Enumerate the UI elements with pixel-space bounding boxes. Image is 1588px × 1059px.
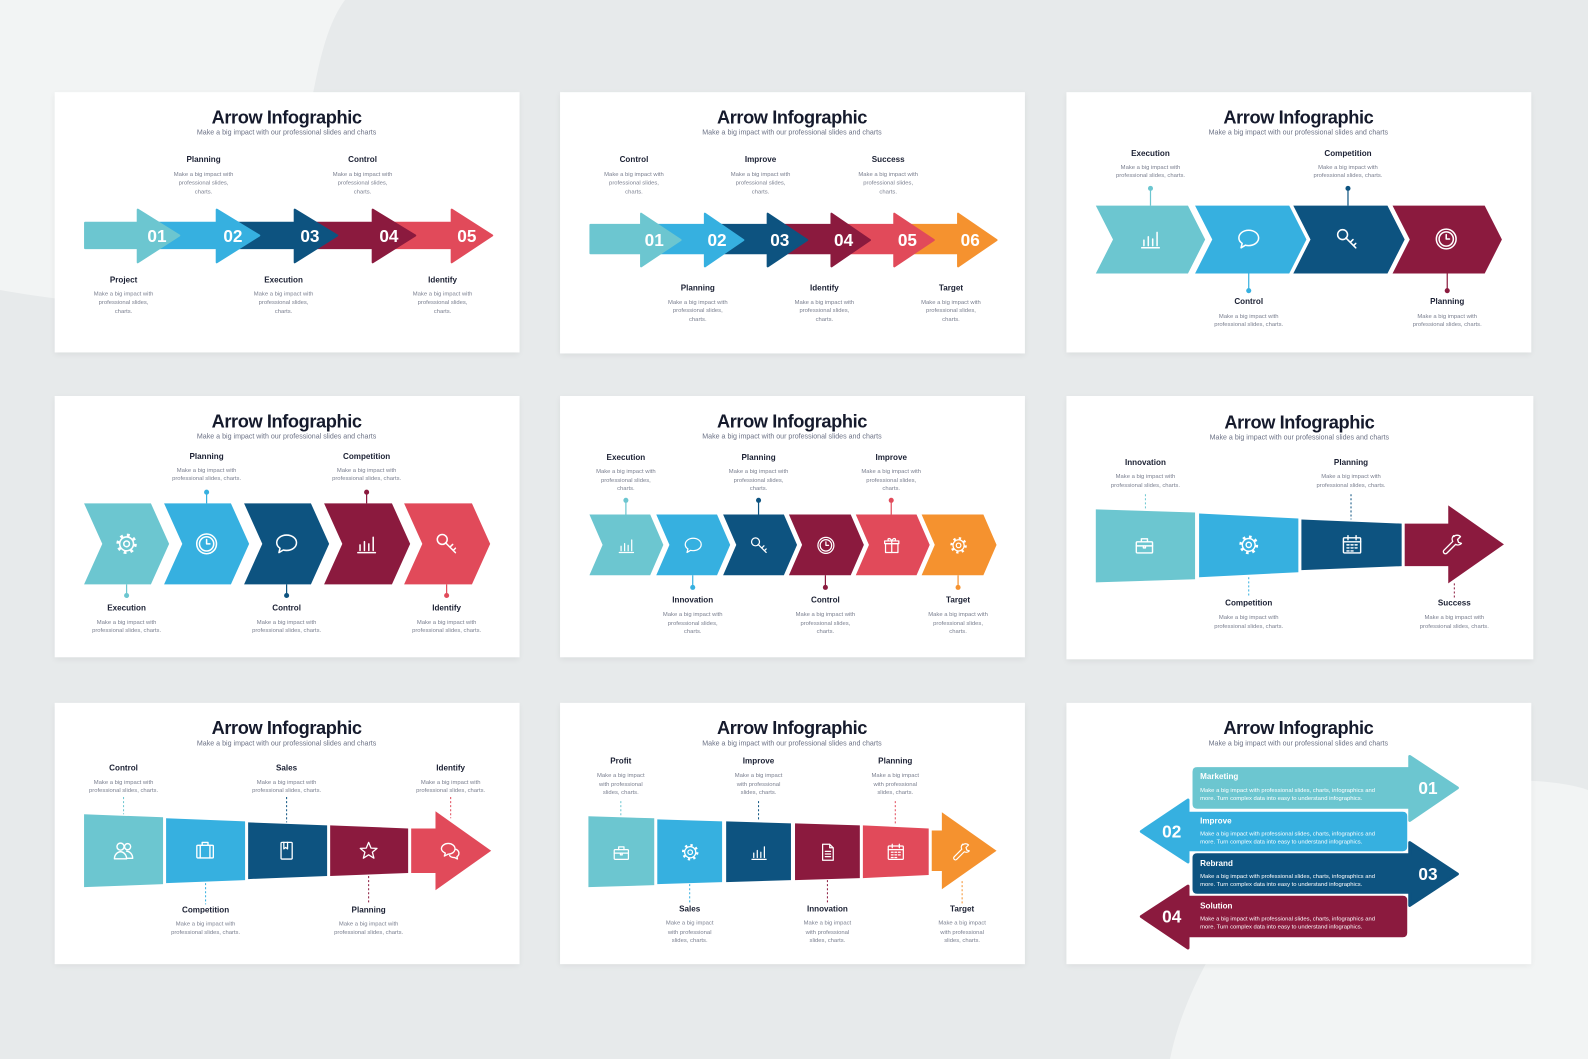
arrows 01-05: 04 (379, 226, 399, 246)
label: Control: Make a big impact with (257, 620, 316, 626)
arrows 01-06: 04 (834, 230, 854, 250)
label: Target: professional slides, (933, 621, 983, 627)
label: Planning (871, 757, 919, 796)
label: Control (1214, 297, 1284, 328)
label: Improve: with professional (736, 782, 780, 788)
label: Execution: Make a big impact with (97, 620, 156, 626)
label: Planning: Planning (741, 453, 776, 462)
label: Planning: Make a big impact with (339, 922, 398, 928)
label: Competition: Competition (343, 452, 390, 461)
arrow 01 Marketing: more. Turn complex data into easy to understand infographics. (1200, 796, 1363, 802)
arrows 01-06: 03 (770, 230, 789, 250)
arrow 02 Improve: Improve (1200, 816, 1232, 825)
label: Identify: Identify (436, 764, 466, 773)
label: Sales: professional slides, charts. (252, 788, 322, 794)
label: Control: Control (272, 604, 301, 613)
label: Identify: Identify (810, 284, 839, 293)
label: Profit (597, 757, 645, 796)
arrow 04 Solution: more. Turn complex data into easy to understand infographics. (1200, 925, 1363, 931)
label: Identify (795, 284, 854, 323)
label: Sales: Make a big impact with (257, 780, 316, 786)
heading: Arrow Infographic (717, 108, 867, 128)
label: Control: Make a big impact with (796, 612, 855, 618)
label: Success: Success (1438, 599, 1471, 608)
label: Planning: Make a big impact with (668, 300, 728, 306)
arrow 04 Solution (1141, 886, 1406, 948)
label: Control: Make a big impact with (333, 172, 392, 178)
label: Planning: Planning (878, 757, 912, 766)
label: Target: Make a big impact (938, 921, 986, 927)
label: Competition (1313, 149, 1383, 179)
label: Identify: Make a big impact with (413, 292, 472, 298)
label: Planning: Make a big impact with (1321, 474, 1381, 480)
label: Planning: professional slides, charts. (1413, 322, 1482, 328)
label: Sales: slides, charts. (672, 938, 708, 944)
panel: card 3 four chevrons with icons (1066, 92, 1531, 352)
tapered segments and arrow (84, 811, 491, 890)
heading (702, 411, 882, 441)
label: Control: professional slides, (338, 180, 388, 186)
label: Control: professional slides, (800, 621, 851, 627)
label: Success: Make a big impact with (1425, 615, 1484, 621)
label: Identify: Identify (432, 604, 462, 613)
panel: card 9 alternating arrows (1066, 703, 1531, 964)
heading (1209, 718, 1389, 747)
label: Control: charts. (625, 189, 643, 195)
label: Execution: professional slides, (259, 300, 309, 306)
label: Innovation: professional slides, charts. (1111, 483, 1180, 489)
label: Control: charts. (354, 189, 372, 195)
heading: Make a big impact with our professional slides and charts (197, 433, 377, 441)
label: Target: Target (950, 904, 974, 913)
arrow 04 Solution: Make a big impact with professional slides, charts, infographics and (1200, 917, 1375, 923)
heading: Arrow Infographic (1223, 718, 1374, 738)
label: Planning (172, 452, 241, 482)
arrow 02 Improve: 02 (1162, 822, 1181, 842)
heading: Make a big impact with our professional slides and charts (197, 739, 377, 747)
label: Identify: professional slides, (418, 300, 468, 306)
label: Control: Control (348, 155, 377, 164)
label: Planning: Planning (190, 452, 224, 461)
pins (623, 498, 961, 590)
label: Innovation (804, 904, 852, 944)
label: Identify (413, 276, 472, 315)
label: Target: Target (939, 284, 963, 293)
dashed connectors (124, 797, 451, 904)
label: Project: Make a big impact with (94, 292, 153, 298)
label: Improve: charts. (752, 189, 770, 195)
label: Profit: with professional (598, 782, 643, 788)
arrow 04 Solution: 04 (1162, 907, 1182, 927)
label: Competition (1214, 599, 1284, 630)
arrow 03 Rebrand: Rebrand (1200, 859, 1233, 868)
label: Profit: Make a big impact (597, 773, 645, 779)
panel: card 8 tapered six-part arrow (560, 703, 1025, 964)
label: Success: Make a big impact with (858, 172, 918, 178)
label: Target (938, 904, 986, 944)
label: Control: Control (109, 764, 138, 773)
heading (197, 411, 377, 441)
tapered segments and arrow (1096, 505, 1504, 583)
arrows 01-05: 02 (223, 226, 243, 246)
label: Target (928, 596, 988, 635)
label: Competition: Competition (182, 905, 229, 914)
label: Competition: professional slides, charts. (171, 930, 240, 936)
label: Execution (254, 276, 313, 315)
label: Profit: slides, charts. (603, 790, 639, 796)
label: Planning: charts. (689, 317, 707, 323)
label: Innovation: professional slides, (668, 621, 718, 627)
label: Target (921, 284, 981, 323)
label: Planning: Make a big impact with (729, 469, 788, 475)
heading: Arrow Infographic (717, 718, 867, 738)
arrow 01 Marketing: Marketing (1200, 772, 1238, 781)
heading: Make a big impact with our professional slides and charts (1209, 129, 1389, 137)
panel: card 4 five chevrons (55, 396, 520, 657)
heading (1209, 108, 1389, 137)
label: Target: professional slides, (926, 308, 976, 314)
arrow 01 Marketing: 01 (1418, 778, 1438, 798)
label: Target: charts. (942, 317, 960, 323)
label: Innovation: Make a big impact (804, 921, 852, 927)
label: Control: charts. (817, 629, 835, 635)
label: Sales: with professional (667, 930, 712, 936)
label: Identify: professional slides, (799, 308, 850, 314)
pins (124, 490, 449, 598)
label: Identify: Make a big impact with (417, 620, 476, 626)
label: Improve: Make a big impact with (731, 172, 790, 178)
heading: Arrow Infographic (212, 411, 362, 431)
arrow 02 Improve: more. Turn complex data into easy to understand infographics. (1200, 840, 1363, 846)
label: Improve: Make a big impact (735, 773, 783, 779)
heading: Make a big impact with our professional slides and charts (702, 739, 882, 747)
label: Identify: Make a big impact with (421, 780, 480, 786)
label: Improve: slides, charts. (741, 790, 777, 796)
label: Success (858, 155, 918, 195)
label: Planning: Planning (186, 155, 221, 164)
arrow 01 Marketing (1194, 757, 1457, 820)
label: Identify: charts. (434, 309, 452, 315)
label: Project: Project (110, 276, 138, 285)
label: Control: Make a big impact with (94, 780, 153, 786)
heading (197, 718, 377, 747)
label: Innovation: Make a big impact with (1116, 474, 1175, 480)
label: Planning (1413, 297, 1482, 328)
label: Planning: charts. (750, 486, 768, 492)
label: Innovation: with professional (805, 930, 849, 936)
label: Innovation (663, 596, 723, 635)
label: Planning (174, 155, 233, 195)
label: Sales (252, 764, 322, 794)
label: Improve: Improve (745, 155, 777, 164)
label: Planning: professional slides, (734, 478, 784, 484)
arrows 01-05: 05 (457, 226, 477, 246)
label: Competition (332, 452, 402, 482)
label: Innovation: Innovation (672, 596, 713, 605)
label: Execution: charts. (617, 486, 635, 492)
label: Execution (1116, 149, 1185, 179)
label: Planning: professional slides, (673, 308, 723, 314)
label: Identify: professional slides, charts. (416, 788, 486, 794)
label: Execution: Execution (607, 453, 645, 462)
label: Planning (1316, 458, 1386, 489)
label: Execution: charts. (275, 309, 293, 315)
heading (1210, 412, 1390, 442)
arrow 02 Improve: Make a big impact with professional slides, charts, infographics and (1200, 832, 1375, 838)
label: Competition: Competition (1324, 149, 1372, 158)
label: Success (1420, 599, 1489, 630)
label: Planning (729, 453, 788, 492)
label: Competition: Make a big impact with (176, 922, 235, 928)
heading (702, 718, 882, 747)
label: Execution: Execution (264, 276, 303, 285)
arrows 01-05: 01 (147, 226, 167, 246)
heading: Make a big impact with our professional slides and charts (1209, 739, 1389, 747)
label: Competition: Competition (1225, 599, 1272, 608)
label: Control (89, 764, 158, 794)
panel: card 6 tapered arrow (1066, 396, 1533, 659)
label: Execution: Make a big impact with (1121, 165, 1180, 171)
heading (702, 108, 882, 137)
label: Control (796, 596, 855, 635)
heading: Arrow Infographic (212, 108, 362, 128)
label: Planning: Planning (1430, 297, 1464, 306)
label: Control: professional slides, charts. (89, 788, 158, 794)
heading: Arrow Infographic (1223, 108, 1374, 128)
label: Success: professional slides, (863, 180, 913, 186)
label: Competition: professional slides, charts. (1313, 173, 1383, 179)
heading: Make a big impact with our professional slides and charts (702, 129, 882, 137)
label: Planning: Make a big impact (871, 773, 919, 779)
label: Target: Target (946, 596, 970, 605)
heading: Arrow Infographic (1224, 412, 1375, 432)
label: Planning (334, 905, 404, 936)
label: Control (252, 604, 322, 634)
label: Improve: professional slides, (736, 180, 786, 186)
arrows 01-06: 01 (645, 230, 664, 250)
heading: Make a big impact with our professional slides and charts (1210, 434, 1390, 442)
label: Control: professional slides, charts. (252, 628, 322, 634)
label: Target: Make a big impact with (928, 612, 988, 618)
chevrons (84, 503, 490, 584)
label: Improve: professional slides, (866, 478, 917, 484)
label: Execution: Make a big impact with (254, 292, 313, 298)
label: Target: charts. (949, 629, 967, 635)
label: Execution: Execution (107, 604, 146, 613)
heading: Make a big impact with our professional slides and charts (197, 129, 377, 137)
tapered segments and arrow (588, 812, 997, 889)
label: Planning: Planning (352, 905, 386, 914)
chevrons (1096, 206, 1502, 273)
label: Control: professional slides, charts. (1214, 322, 1284, 328)
label: Execution: Make a big impact with (596, 469, 656, 475)
pins (1148, 186, 1450, 293)
label: Execution: Execution (1131, 149, 1170, 158)
label: Profit: Profit (610, 757, 632, 766)
label: Project: charts. (115, 309, 133, 315)
arrow 02 Improve (1141, 800, 1406, 862)
label: Improve: Improve (875, 453, 907, 462)
label: Planning: professional slides, charts. (1316, 483, 1386, 489)
label: Planning: slides, charts. (877, 790, 914, 796)
label: Competition: Make a big impact with (337, 468, 396, 474)
arrow 04 Solution: Solution (1200, 901, 1233, 910)
label: Success: professional slides, charts. (1420, 624, 1489, 630)
panel: card 2 six numbered arrows (560, 92, 1025, 353)
label: Execution: professional slides, (601, 478, 651, 484)
label: Execution: professional slides, charts. (1116, 173, 1185, 179)
label: Target: slides, charts. (944, 938, 980, 944)
label: Target: Make a big impact with (921, 300, 981, 306)
dashed connectors (621, 801, 962, 903)
arrow 03 Rebrand: more. Turn complex data into easy to understand infographics. (1200, 882, 1363, 888)
arrow 03 Rebrand: Make a big impact with professional slides, charts, infographics and (1200, 874, 1375, 880)
label: Innovation: charts. (684, 629, 702, 635)
label: Innovation: Innovation (807, 904, 848, 913)
label: Planning: professional slides, (179, 180, 229, 186)
label: Improve (735, 757, 783, 796)
label: Control (333, 155, 392, 195)
label: Project: professional slides, (99, 300, 149, 306)
label: Control: Make a big impact with (604, 172, 664, 178)
label: Improve: charts. (882, 486, 900, 492)
label: Identify: Make a big impact with (795, 300, 854, 306)
label: Improve (731, 155, 790, 195)
label: Control (604, 155, 664, 195)
arrows 01-06: 06 (961, 230, 980, 250)
heading: Arrow Infographic (212, 718, 362, 738)
label: Competition: professional slides, charts. (332, 476, 402, 482)
label: Planning: Make a big impact with (174, 172, 233, 178)
label: Planning: Make a big impact with (177, 468, 236, 474)
label: Project (94, 276, 153, 315)
label: Sales: Sales (276, 764, 298, 773)
label: Innovation (1111, 458, 1180, 489)
heading: Make a big impact with our professional slides and charts (702, 433, 882, 441)
label: Competition: professional slides, charts. (1214, 624, 1284, 630)
label: Sales (666, 904, 714, 944)
dashed connectors (1145, 494, 1454, 598)
label: Innovation: Innovation (1125, 458, 1166, 467)
arrow 03 Rebrand (1194, 843, 1457, 905)
label: Execution: professional slides, charts. (92, 628, 161, 634)
label: Planning: Planning (681, 284, 715, 293)
label: Planning: professional slides, charts. (172, 476, 241, 482)
label: Innovation: slides, charts. (810, 938, 846, 944)
panel: card 1 five numbered arrows (55, 92, 520, 352)
label: Planning: with professional (872, 782, 917, 788)
label: Success: Success (872, 155, 905, 164)
label: Planning: charts. (195, 189, 213, 195)
label: Improve (861, 453, 921, 492)
label: Improve: Improve (743, 757, 775, 766)
arrows 01-06: 05 (898, 230, 917, 250)
label: Innovation: Make a big impact with (663, 612, 723, 618)
label: Target: with professional (939, 930, 984, 936)
label: Sales: Sales (679, 904, 701, 913)
label: Success: charts. (879, 189, 897, 195)
label: Control: Control (620, 155, 648, 164)
label: Control: Control (811, 596, 840, 605)
arrows 01-05: 03 (300, 226, 319, 246)
label: Control: Control (1234, 297, 1263, 306)
heading: Arrow Infographic (717, 411, 867, 431)
label: Planning: Make a big impact with (1417, 314, 1477, 320)
label: Competition: Make a big impact with (1219, 615, 1279, 621)
label: Control: Make a big impact with (1219, 314, 1279, 320)
chevrons (589, 514, 997, 575)
label: Planning: Planning (1334, 458, 1368, 467)
label: Identify: Identify (428, 276, 457, 285)
arrow 03 Rebrand: 03 (1418, 864, 1438, 884)
panel: card 7 tapered five-part arrow (55, 703, 520, 964)
heading (197, 108, 377, 137)
label: Planning (668, 284, 728, 323)
label: Identify: professional slides, charts. (412, 628, 482, 634)
arrows 01-05 (85, 210, 492, 262)
label: Competition (171, 905, 240, 936)
arrows 01-06 (590, 214, 997, 266)
arrow 01 Marketing: Make a big impact with professional slides, charts, infographics and (1200, 788, 1375, 794)
label: Identify (412, 604, 482, 634)
label: Identify: charts. (816, 317, 834, 323)
arrows 01-06: 02 (707, 230, 727, 250)
label: Sales: Make a big impact (666, 921, 714, 927)
panel: card 5 six chevrons (560, 396, 1025, 657)
label: Execution (596, 453, 656, 492)
label: Improve: Make a big impact with (861, 469, 921, 475)
label: Competition: Make a big impact with (1318, 165, 1378, 171)
label: Planning: professional slides, charts. (334, 930, 404, 936)
label: Identify (416, 764, 486, 794)
label: Execution (92, 604, 161, 634)
label: Control: professional slides, (609, 180, 659, 186)
